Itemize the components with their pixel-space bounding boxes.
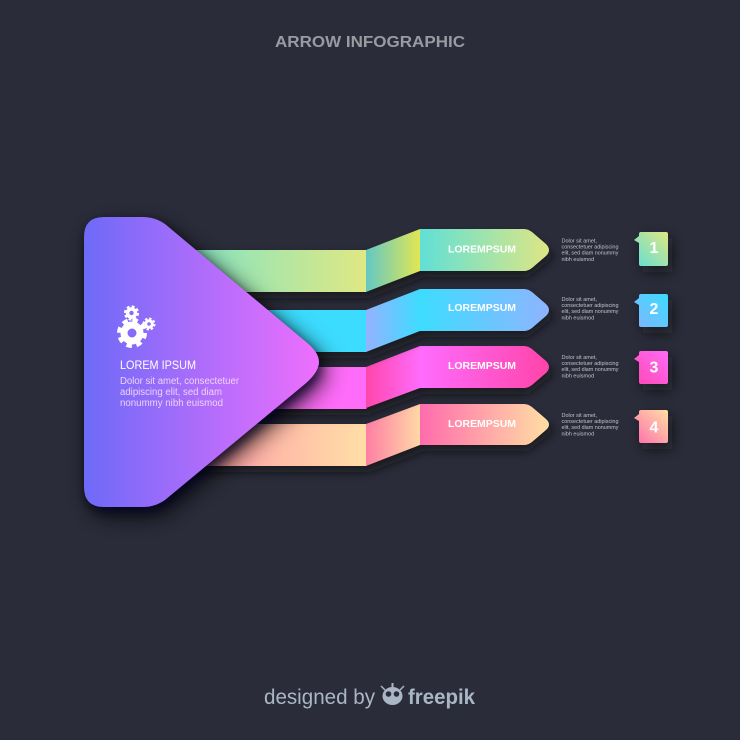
description text 3: nibh euismod	[562, 374, 594, 380]
number badge 1	[634, 232, 672, 272]
panel body text: adipiscing elit, sed diam	[120, 387, 222, 398]
description text 4: consectetuer adipiscing	[562, 419, 618, 425]
number badge 2	[634, 294, 672, 333]
ribbon 2: cyan: LOREMPSUM	[448, 303, 516, 314]
description text 1: consectetuer adipiscing	[562, 244, 618, 250]
description text 1: Dolor sit amet,	[562, 238, 597, 244]
ribbon 4: peach: LOREMPSUM	[448, 419, 516, 430]
description text 3	[562, 355, 619, 380]
description text 2	[562, 297, 619, 322]
ribbon 4: peach	[190, 404, 555, 472]
number badge 3	[634, 351, 672, 390]
description text 2: nibh euismod	[562, 316, 594, 322]
ribbon 3: magenta	[190, 346, 555, 415]
icon: gears	[120, 307, 154, 346]
panel heading: LOREM IPSUM	[120, 360, 196, 372]
description text 2: Dolor sit amet,	[562, 297, 597, 303]
number badge 3: 3	[650, 360, 659, 376]
number badge 1: 1	[650, 240, 659, 257]
panel body text	[120, 376, 240, 409]
number badge 2: 2	[650, 301, 659, 318]
triangle shape	[84, 217, 319, 507]
description text 2: elit, sed diam nonummy	[562, 309, 619, 315]
description text 4: Dolor sit amet,	[562, 413, 597, 419]
description text 1	[562, 238, 619, 263]
description text 2: consectetuer adipiscing	[562, 303, 618, 309]
description text 4: nibh euismod	[562, 432, 594, 438]
number badge 4: 4	[650, 420, 659, 436]
description text 3: consectetuer adipiscing	[562, 361, 618, 367]
panel body text: nonummy nibh euismod	[120, 398, 223, 409]
panel body text: Dolor sit amet, consectetuer	[120, 376, 240, 387]
footer text: designed by: designed by	[264, 686, 375, 709]
description text 4: elit, sed diam nonummy	[562, 425, 619, 431]
description text 3: elit, sed diam nonummy	[562, 367, 619, 373]
description text 1: elit, sed diam nonummy	[562, 250, 619, 256]
ribbon 1: green: LOREMPSUM	[448, 244, 516, 256]
title: ARROW INFOGRAPHIC	[275, 34, 465, 51]
ribbon 2: cyan	[190, 289, 555, 358]
footer text: freepik: freepik	[408, 686, 475, 709]
description text 4	[562, 413, 619, 438]
ribbon 3: magenta: LOREMPSUM	[448, 361, 516, 372]
icon: freepik mascot	[381, 683, 404, 705]
footer credit	[264, 683, 475, 709]
description text 1: nibh euismod	[562, 257, 594, 263]
description text 3: Dolor sit amet,	[562, 355, 597, 361]
main triangle panel	[84, 217, 325, 516]
number badge 4	[634, 410, 672, 449]
ribbon 1: green	[190, 229, 555, 298]
